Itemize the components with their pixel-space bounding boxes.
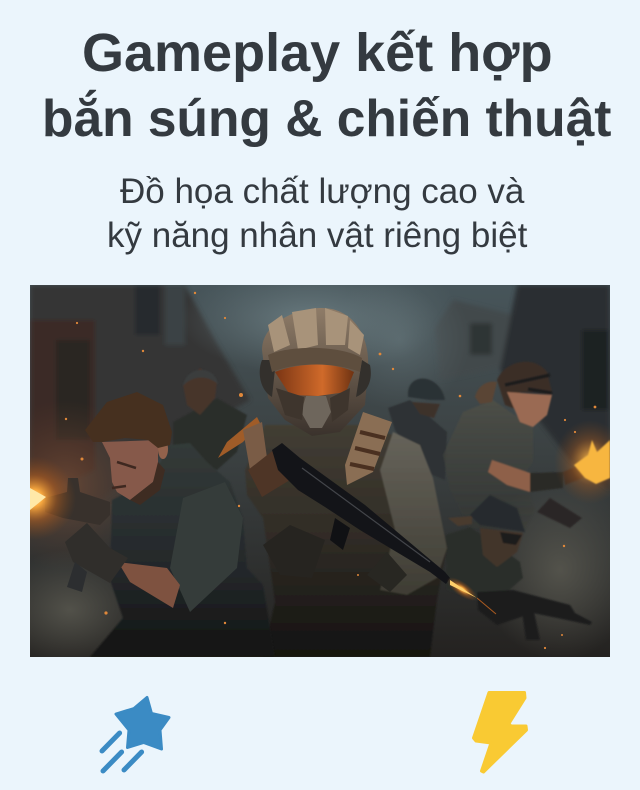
embers bbox=[65, 292, 596, 649]
soldier: woman with ponytail casting fire bbox=[443, 362, 587, 540]
helmet of hero bbox=[260, 308, 371, 436]
subtitle: kỹ năng nhân vật riêng biệt bbox=[107, 216, 527, 255]
background: ruined building left bbox=[30, 285, 250, 500]
smoke bbox=[0, 265, 640, 670]
soldier: front left man shooting bbox=[45, 392, 275, 657]
soldier: back right bbox=[388, 379, 447, 480]
title: bắn súng & chiến thuật bbox=[42, 89, 611, 147]
illustration: squad of soldiers in a ruined city bbox=[30, 285, 610, 657]
hair bbox=[85, 392, 172, 448]
background: ruined building right bbox=[435, 285, 610, 490]
icon: shooting star bbox=[100, 696, 170, 774]
title bbox=[42, 23, 611, 147]
face bbox=[102, 440, 158, 500]
icon: lightning bolt bbox=[472, 691, 528, 774]
soldier: centre armoured hero bbox=[218, 412, 447, 657]
background: smoky sky bbox=[30, 285, 610, 657]
glove bbox=[65, 523, 128, 583]
soldier: crouching front right with rifle bbox=[445, 495, 592, 640]
title: Gameplay kết hợp bbox=[82, 23, 553, 83]
rifle held by hero bbox=[272, 443, 450, 584]
rifle muzzle tracer bbox=[443, 573, 496, 614]
magazine and gun bbox=[67, 562, 87, 592]
muzzle flash left bbox=[0, 456, 76, 540]
fire in hand bbox=[554, 420, 626, 504]
subtitle: Đồ họa chất lượng cao và bbox=[120, 172, 524, 211]
subtitle bbox=[107, 172, 528, 255]
soldier: back left bbox=[173, 368, 247, 470]
